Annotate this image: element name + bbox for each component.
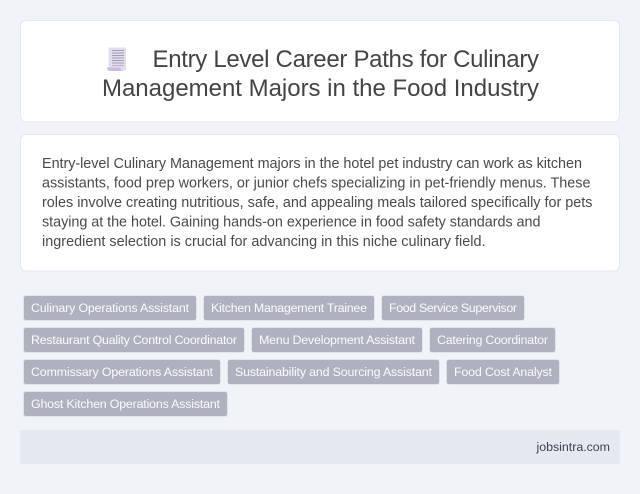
text block: description: ingredient selection is crucial for advancing in this niche culinary field. bbox=[42, 234, 486, 250]
panel: title header bbox=[20, 20, 620, 122]
tag bbox=[446, 360, 560, 384]
tag: Food Service Supervisor bbox=[389, 301, 517, 315]
tag bbox=[24, 392, 228, 416]
tag bbox=[24, 296, 196, 320]
tag: Kitchen Management Trainee bbox=[211, 301, 367, 315]
icon: receipt bbox=[107, 48, 126, 71]
tag bbox=[204, 296, 374, 320]
panel: description bbox=[20, 134, 620, 271]
text block: description: assistants, food prep workers, or junior chefs specializing in pet-friendly menus. These bbox=[42, 176, 590, 192]
text block: description: Entry-level Culinary Management majors in the hotel pet industry can work as kitchen bbox=[42, 156, 582, 172]
tag bbox=[24, 328, 244, 352]
text block: description bbox=[42, 156, 592, 250]
tag: Culinary Operations Assistant bbox=[31, 301, 190, 315]
tag: Menu Development Assistant bbox=[259, 333, 416, 347]
text block: description: staying at the hotel. Gaining hands-on experience in food safety standards and bbox=[42, 214, 540, 230]
tag: Catering Coordinator bbox=[437, 333, 548, 347]
tag: Ghost Kitchen Operations Assistant bbox=[31, 397, 221, 411]
title: Management Majors in the Food Industry bbox=[102, 75, 539, 102]
tag list bbox=[24, 296, 560, 416]
tag: Food Cost Analyst bbox=[454, 365, 553, 379]
title bbox=[102, 46, 539, 102]
tag bbox=[252, 328, 422, 352]
tag bbox=[430, 328, 556, 352]
text block: description: roles involve creating nutritious, safe, and appealing meals tailored specifically for pets bbox=[42, 195, 592, 211]
tag bbox=[24, 360, 220, 384]
tag bbox=[382, 296, 524, 320]
footer source text: jobsintra.com bbox=[536, 440, 610, 454]
tag: Commissary Operations Assistant bbox=[31, 365, 214, 379]
title: Entry Level Career Paths for Culinary bbox=[152, 46, 539, 73]
tag: Sustainability and Sourcing Assistant bbox=[235, 365, 433, 379]
tag: Restaurant Quality Control Coordinator bbox=[31, 333, 237, 347]
footer bbox=[20, 430, 620, 464]
tag bbox=[228, 360, 440, 384]
